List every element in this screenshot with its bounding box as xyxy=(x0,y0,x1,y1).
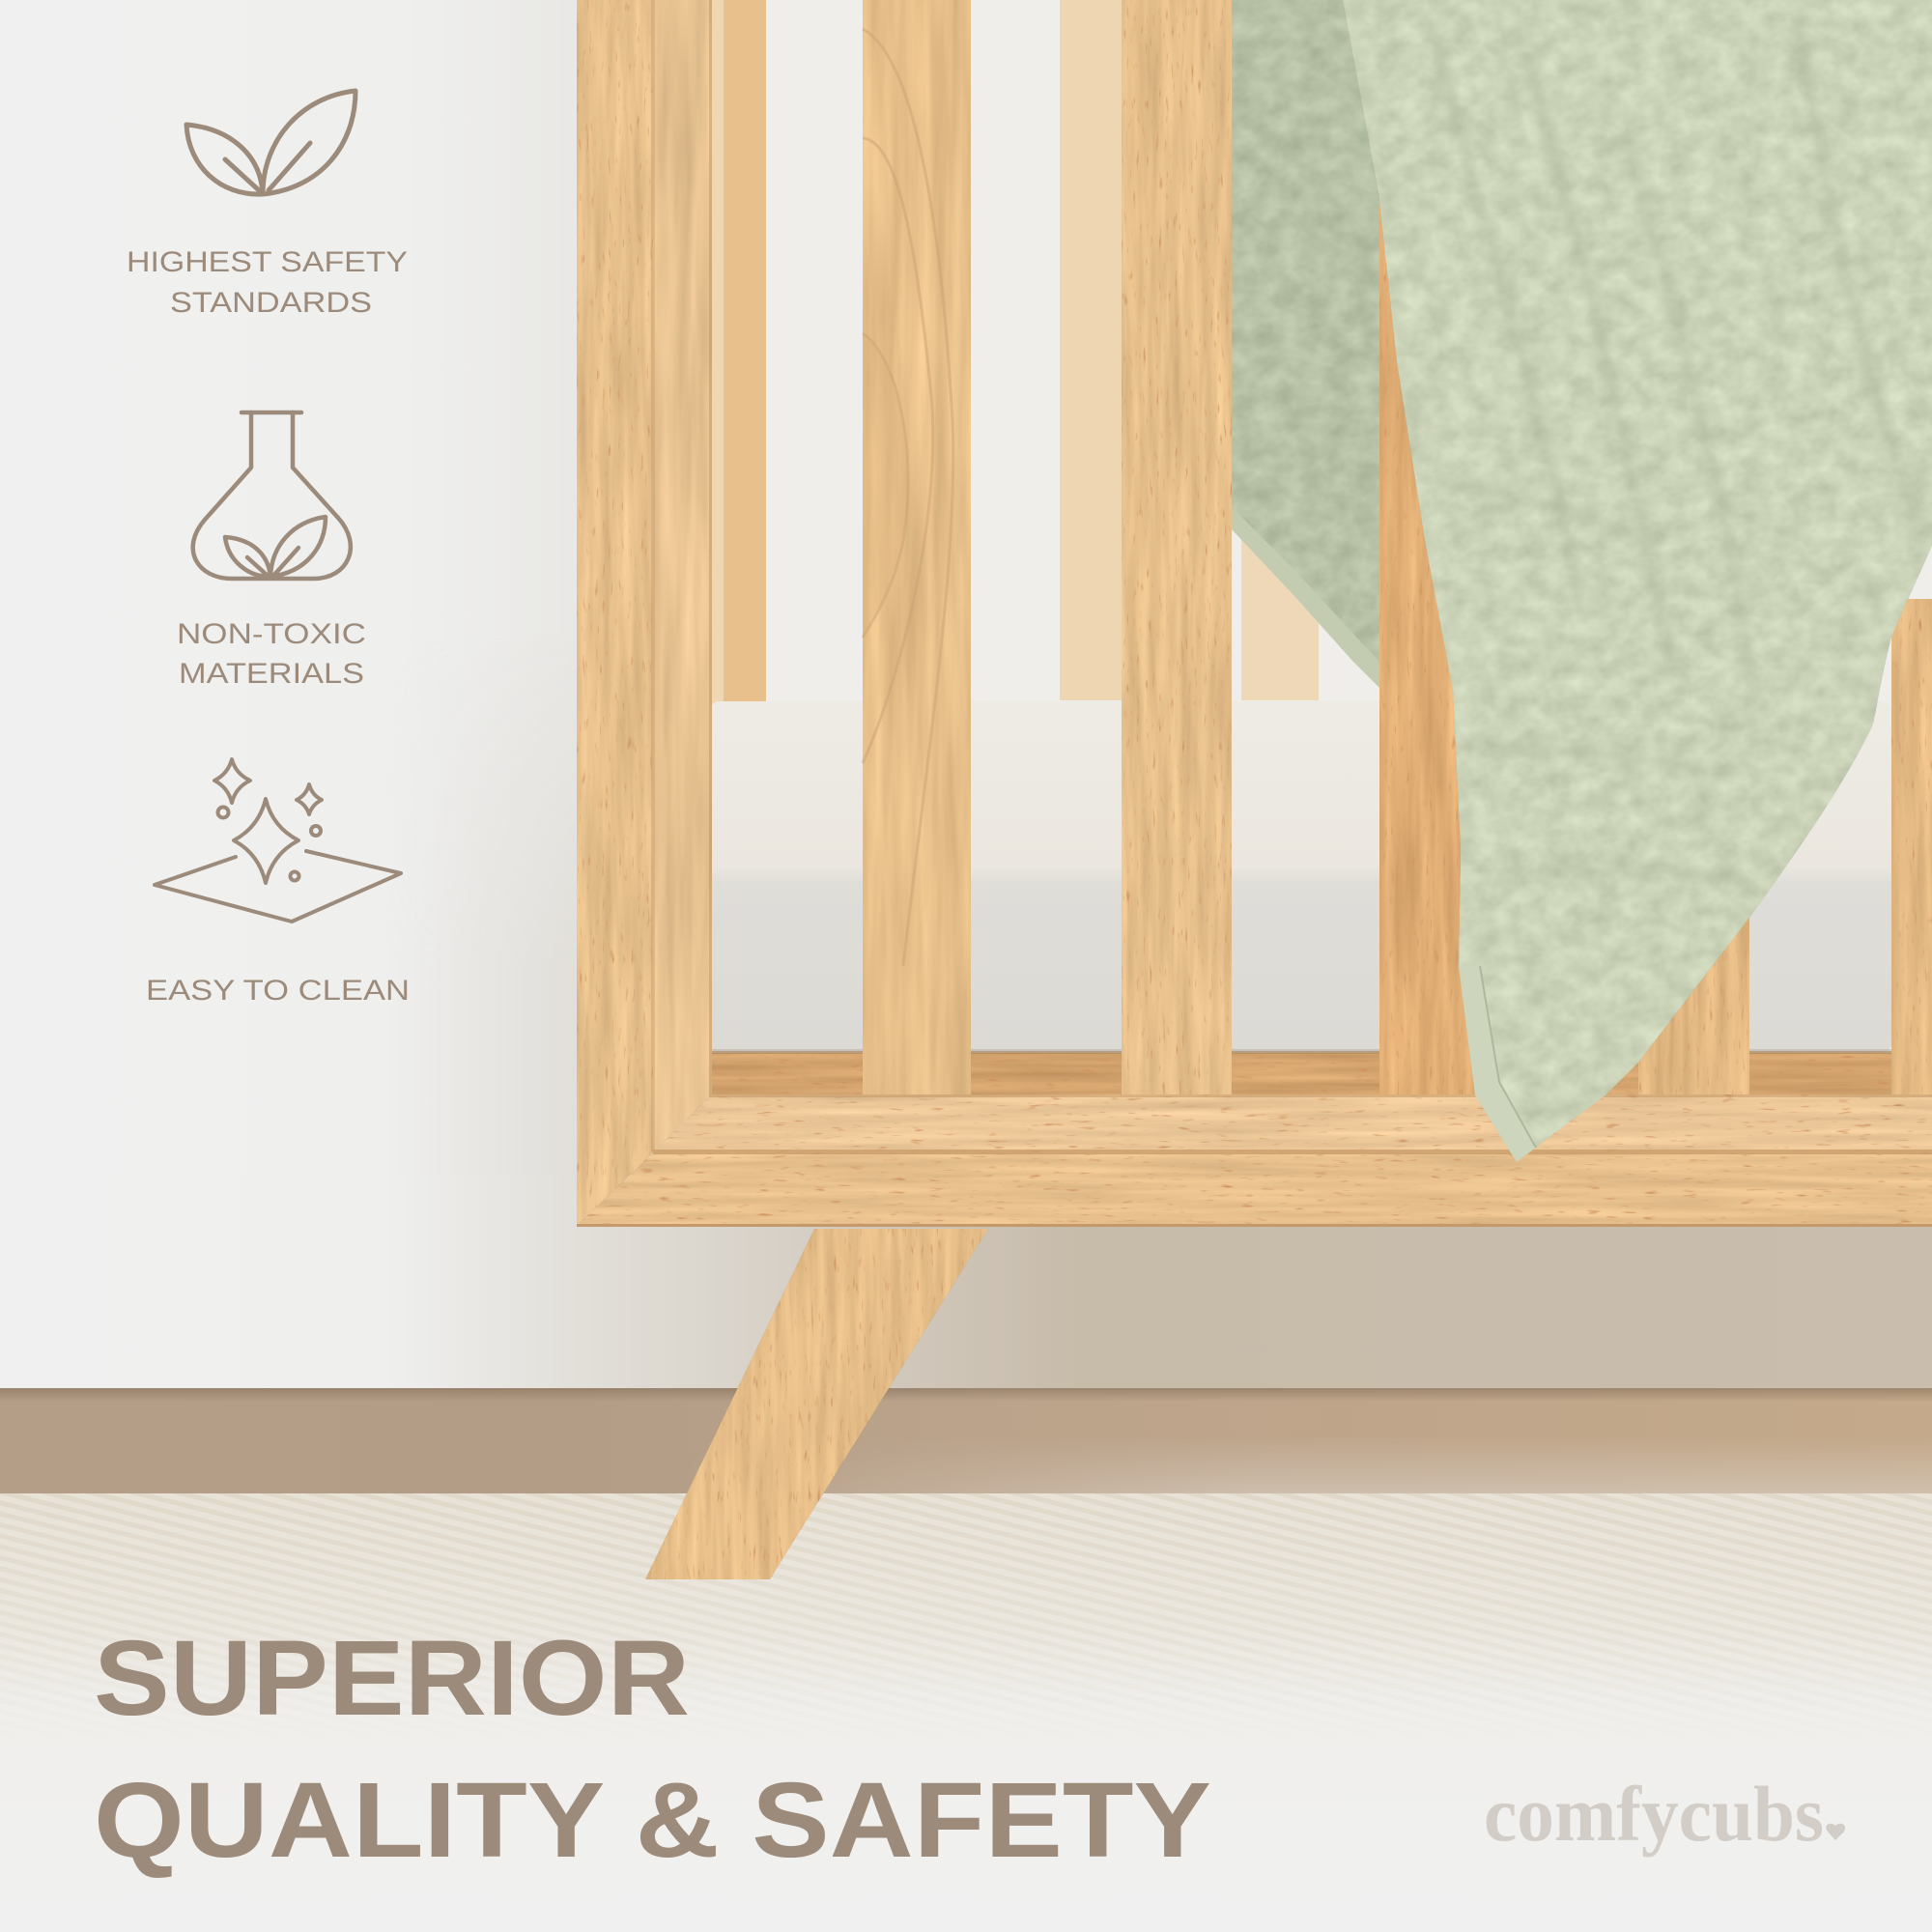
crib frame xyxy=(577,0,1932,1227)
feature: easy to clean xyxy=(146,759,410,1007)
blanket: front drape xyxy=(1343,0,1932,1162)
label: EASY TO CLEAN xyxy=(146,975,410,1007)
title: QUALITY & SAFETY xyxy=(94,1761,1211,1880)
background: wall xyxy=(429,0,1932,1388)
label: NON-TOXIC xyxy=(177,618,366,650)
label xyxy=(127,246,408,319)
label: HIGHEST SAFETY xyxy=(127,246,408,278)
title xyxy=(94,1619,1211,1880)
front slats xyxy=(863,0,1932,1094)
lower inner rail xyxy=(710,1051,1932,1094)
mattress xyxy=(710,701,1891,1053)
icon: sparkling surface xyxy=(155,759,401,922)
blanket: rear fold xyxy=(1229,0,1381,688)
label: MATERIALS xyxy=(179,658,364,690)
label xyxy=(177,618,366,690)
crib leg xyxy=(645,1229,988,1579)
logo: comfycubs: comfycubs xyxy=(1484,1770,1824,1858)
rug xyxy=(0,1493,1932,1712)
feature: non-toxic materials xyxy=(177,412,366,690)
inner left post xyxy=(653,0,712,1152)
title: SUPERIOR xyxy=(94,1619,690,1738)
lower bottom rail xyxy=(577,1152,1932,1226)
feature: highest safety standards xyxy=(127,91,408,319)
label: STANDARDS xyxy=(170,287,372,319)
upper bottom rail xyxy=(653,1094,1932,1152)
back slats of the crib xyxy=(712,0,1319,710)
outer left post xyxy=(577,0,653,1226)
icon: flask with leaves xyxy=(193,412,351,579)
icon: leaves xyxy=(186,91,355,194)
floor xyxy=(0,1388,1932,1494)
